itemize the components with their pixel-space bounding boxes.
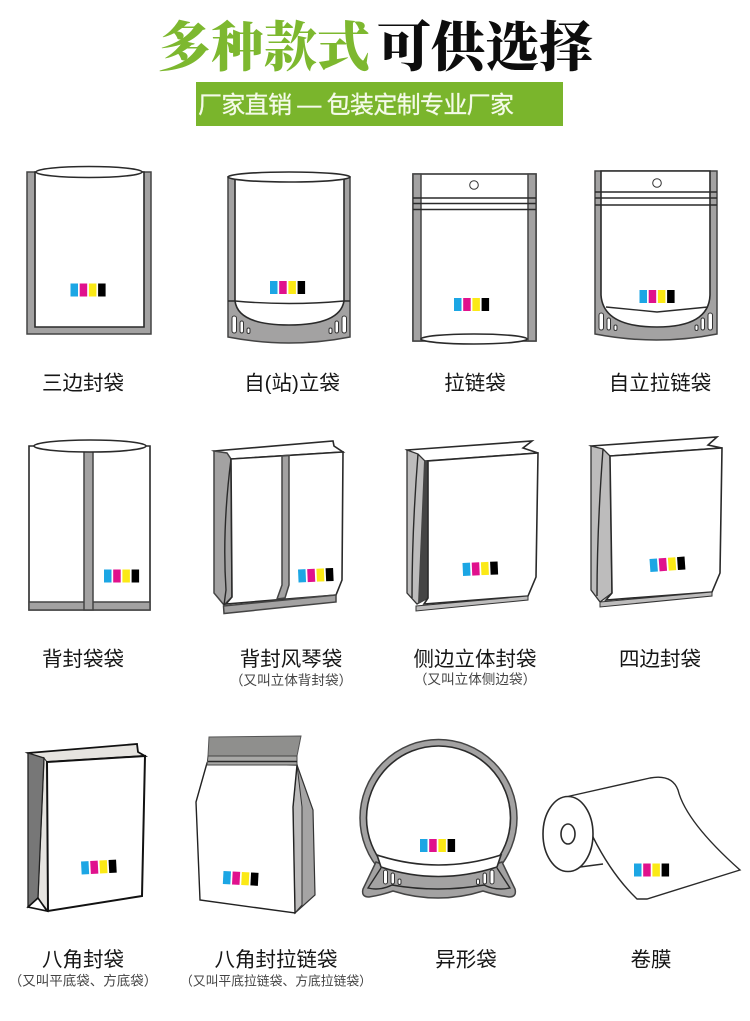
colour swatches <box>223 871 259 886</box>
colour swatches <box>634 864 669 876</box>
colour swatches <box>70 284 106 296</box>
note: flat-bottom bag: （又叫平底袋、方底袋） <box>9 974 157 988</box>
note: side gusset seal: （又叫立体侧边袋） <box>414 672 536 687</box>
note: flat-bottom zipper bag: （又叫平底拉链袋、方底拉链袋） <box>180 974 372 988</box>
label: flat-bottom bag: 八角封袋 <box>42 948 124 972</box>
colour swatches <box>454 298 489 311</box>
label: three-side seal: 三边封袋 <box>42 372 124 395</box>
label: stand-up zipper pouch: 自立拉链袋 <box>609 372 711 395</box>
subtitle banner <box>196 82 563 126</box>
colour swatches <box>298 568 334 582</box>
colour swatches <box>420 839 455 852</box>
bag: stand-up pouch <box>228 172 350 343</box>
title: 多种款式 <box>158 18 370 78</box>
bag: stand-up zipper pouch <box>595 171 717 340</box>
label: flat-bottom zipper bag: 八角封拉链袋 <box>214 948 338 972</box>
title: 可供选择 <box>377 18 593 78</box>
label: four-side seal: 四边封袋 <box>619 648 701 671</box>
bag: flat-bottom bag <box>28 744 145 911</box>
note: back seal with gusset: （又叫立体背封袋） <box>230 673 352 688</box>
bag: back seal <box>29 440 150 610</box>
label: back seal with gusset: 背封风琴袋 <box>240 648 342 671</box>
film roll <box>543 777 740 899</box>
label: stand-up pouch: 自(站)立袋 <box>244 372 340 395</box>
colour swatches <box>650 557 685 572</box>
bag: four-side seal <box>591 437 722 607</box>
colour swatches <box>640 290 675 303</box>
colour swatches <box>462 561 498 576</box>
bag: shaped pouch <box>360 740 517 898</box>
label: back seal: 背封袋袋 <box>42 648 124 671</box>
subtitle banner: 厂家直销 — 包装定制专业厂家 <box>198 92 514 119</box>
bag: side gusset seal <box>407 441 538 611</box>
title <box>158 18 593 78</box>
colour swatches <box>104 570 139 582</box>
label: zipper pouch: 拉链袋 <box>444 372 506 395</box>
bag: back seal with gusset <box>214 441 343 614</box>
label: shaped pouch: 异形袋 <box>435 948 497 972</box>
bag: zipper pouch <box>413 174 536 344</box>
colour swatches <box>270 281 305 294</box>
bag: three-side seal <box>27 166 151 334</box>
label: film roll: 卷膜 <box>630 948 672 972</box>
label: side gusset seal: 侧边立体封袋 <box>414 648 536 671</box>
colour swatches <box>81 860 117 874</box>
bag: flat-bottom zipper bag <box>196 736 315 913</box>
